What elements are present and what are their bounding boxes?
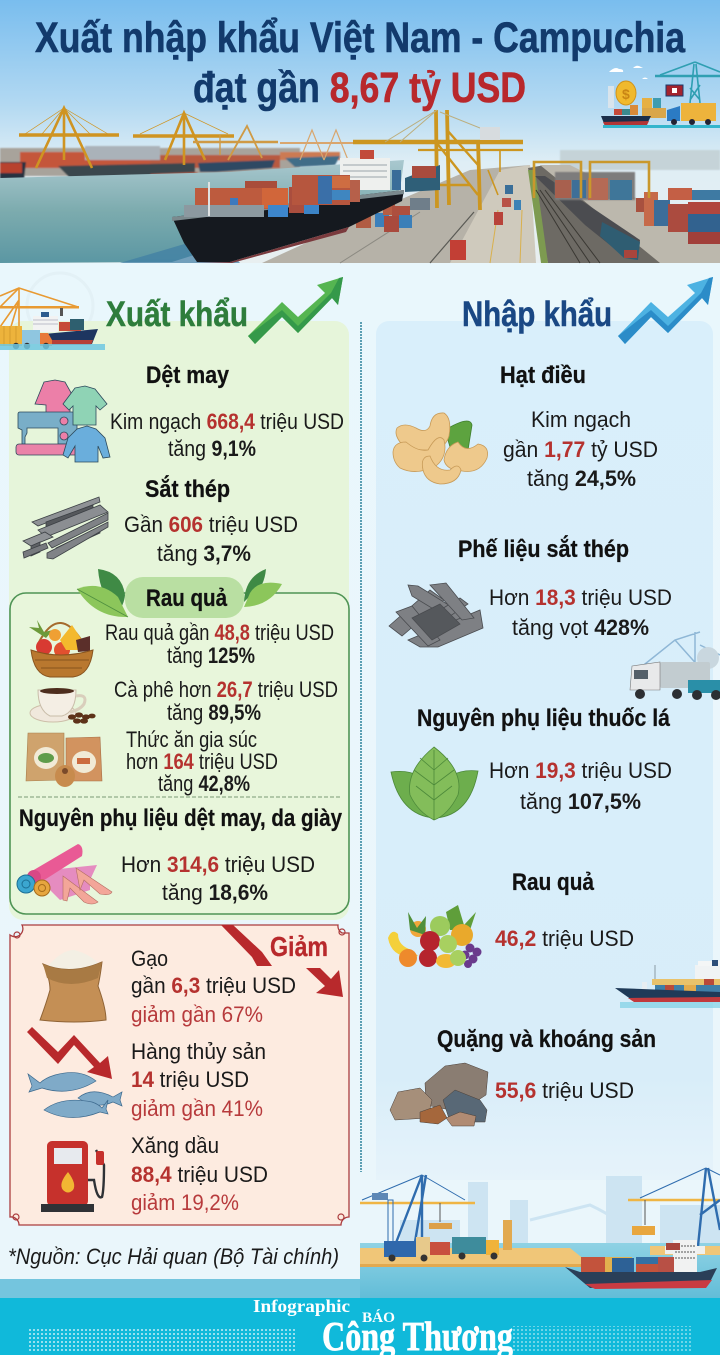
icon: coffee cup: [30, 688, 96, 724]
corner ornaments: [13, 929, 345, 1220]
item: Hạt điều: tăng 24,5%: [527, 466, 636, 491]
train: [535, 176, 640, 258]
panel: Rau quả group: Nguyên phụ liệu dệt may, da giày: [19, 805, 342, 832]
heading: Giảm: Giảm: [270, 931, 328, 962]
icon: fuel pump: [41, 1141, 104, 1212]
icon: mini port with flag and coin: [601, 62, 720, 128]
icon: sewing machine and shirts: [16, 380, 110, 462]
panel: Rau quả group: Rau quả gần 48,8 triệu USD: [105, 620, 334, 645]
source note: *Nguồn: Cục Hải quan (Bộ Tài chính): [8, 1244, 339, 1269]
item: Nguyên phụ liệu thuốc lá: [391, 705, 672, 820]
dotted divider: [360, 322, 362, 1172]
quay: [262, 165, 535, 263]
panel: Rau quả group: tăng 42,8%: [158, 771, 250, 796]
item: Phế liệu sắt thép: Hơn 18,3 triệu USD: [489, 585, 672, 610]
icon: red falling arrow behind heading: [221, 925, 343, 997]
panel: Rau quả group: [10, 569, 349, 914]
panel: Rau quả group: Cà phê hơn 26,7 triệu USD: [114, 677, 338, 702]
icon: green up arrow: [248, 277, 343, 344]
crane left: [360, 1175, 475, 1248]
container ship hull: [172, 190, 404, 262]
item: Nguyên phụ liệu thuốc lá: tăng 107,5%: [520, 789, 641, 814]
item: Dệt may: [16, 362, 344, 462]
brand logo: Infographic: [253, 1296, 350, 1316]
trucks on dock: [384, 1220, 512, 1262]
item: Sắt thép: Sắt thép: [145, 475, 230, 503]
item: Sắt thép: Gần 606 triệu USD: [124, 512, 298, 537]
item: Sắt thép: [23, 475, 298, 566]
faint seal watermark: [27, 273, 93, 339]
panel: decreases: giảm 19,2%: [131, 1190, 239, 1215]
brand logo: BÁO: [362, 1309, 395, 1326]
panel: decreases: 88,4 triệu USD: [131, 1162, 268, 1187]
main crane: [353, 110, 523, 210]
skyline: [400, 1176, 720, 1246]
pill label: [125, 577, 244, 618]
icon: animal feed bags: [26, 733, 102, 787]
water: [0, 160, 404, 263]
icon: steel beams: [23, 497, 108, 559]
item: Phế liệu sắt thép: [389, 535, 672, 647]
heading: Xuất khẩu: Xuất khẩu: [106, 295, 248, 334]
item: Phế liệu sắt thép: tăng vọt 428%: [512, 615, 649, 640]
icon: fish: [28, 1073, 122, 1118]
item: Hạt điều: [393, 362, 658, 491]
brand logo: [253, 1296, 513, 1355]
rail gantries: [534, 162, 649, 198]
icon: scrap metal: [389, 583, 483, 647]
far cranes: [19, 108, 353, 168]
icon: falling zigzag arrow: [27, 1027, 112, 1079]
sea: [360, 1243, 720, 1298]
item: Dệt may: Kim ngạch 668,4 triệu USD: [110, 409, 344, 434]
hero photo: container port: [0, 0, 720, 263]
panel: Rau quả group: Hơn 314,6 triệu USD: [121, 852, 315, 877]
item: Hạt điều: gần 1,77 tỷ USD: [503, 437, 658, 462]
panel: decreases: gần 6,3 triệu USD: [131, 973, 296, 998]
item: Rau quả import: 46,2 triệu USD: [495, 926, 634, 951]
dotted strips: [28, 1328, 296, 1352]
panel: Rau quả group: Thức ăn gia súc: [126, 727, 257, 752]
panel: decreases: 14 triệu USD: [131, 1067, 249, 1092]
icon: left leaves: [77, 569, 128, 617]
item: Dệt may: Dệt may: [146, 362, 229, 389]
icon: fabric rolls and shoes: [17, 844, 112, 904]
right container stacks: [555, 172, 720, 244]
item: Nguyên phụ liệu thuốc lá: Nguyên phụ liệu thuốc lá: [417, 705, 670, 732]
item: Sắt thép: tăng 3,7%: [157, 541, 251, 566]
icon: cashews: [393, 413, 488, 484]
title: đạt gần 8,67 tỷ USD: [193, 64, 526, 112]
icon: right leaves: [244, 569, 282, 607]
icon: cargo ship: [615, 960, 720, 1008]
item: Quặng và khoáng sản: Quặng và khoáng sản: [437, 1026, 656, 1053]
dock left: [360, 1248, 590, 1266]
pill label: Rau quả: [146, 585, 227, 612]
icon: fruit basket: [29, 620, 93, 677]
panel: Rau quả group: tăng 18,6%: [162, 880, 268, 905]
illustration: port scene bottom right: [360, 1168, 720, 1298]
icon: tobacco leaves: [391, 747, 478, 820]
icon: rocks: [390, 1063, 488, 1126]
panel: imports background: [376, 321, 713, 1180]
panel: decreases: [10, 925, 349, 1225]
item: Quặng và khoáng sản: 55,6 triệu USD: [495, 1078, 634, 1103]
panel: decreases: giảm gần 41%: [131, 1096, 263, 1121]
icon: mini port with flag and coin: $: [622, 86, 630, 102]
title: [35, 14, 686, 112]
footer band: [0, 1279, 720, 1355]
item: Rau quả import: Rau quả: [512, 869, 594, 896]
quay containers: [356, 185, 521, 260]
panel: decreases: Xăng dầu: [131, 1133, 219, 1158]
item: Rau quả import: [388, 869, 634, 968]
icon: truck with crane: [630, 632, 720, 700]
far shoreline: [0, 146, 720, 186]
icon: blue up arrow: [618, 277, 713, 344]
ship: [565, 1240, 717, 1289]
panel: decreases: Gạo: [131, 946, 168, 971]
panel: Rau quả group: tăng 125%: [167, 643, 255, 668]
ship cargo: [184, 170, 401, 217]
panel: decreases: Hàng thủy sản: [131, 1039, 266, 1064]
crane right: [628, 1168, 720, 1246]
icon: port left of export heading: [0, 288, 105, 350]
panel: Rau quả group: tăng 89,5%: [167, 700, 261, 725]
item: Phế liệu sắt thép: Phế liệu sắt thép: [458, 535, 629, 563]
item: Hạt điều: Kim ngạch: [531, 407, 631, 432]
ship superstructure: [340, 158, 390, 190]
icon: rice sack: [40, 950, 106, 1022]
panel: Rau quả group: hơn 164 triệu USD: [126, 749, 278, 774]
item: Hạt điều: Hạt điều: [500, 362, 586, 389]
item: Quặng và khoáng sản: [390, 1026, 656, 1126]
item: Nguyên phụ liệu thuốc lá: Hơn 19,3 triệu USD: [489, 758, 672, 783]
rail yard: [528, 165, 720, 263]
panel: decreases: giảm gần 67%: [131, 1002, 263, 1027]
item: Dệt may: tăng 9,1%: [168, 436, 256, 461]
icon: fruit pile: [388, 905, 482, 968]
middle ship on quay: [405, 165, 440, 192]
dock right: [650, 1246, 720, 1255]
heading: Nhập khẩu: Nhập khẩu: [462, 295, 612, 334]
panel: exports background: [9, 321, 349, 920]
